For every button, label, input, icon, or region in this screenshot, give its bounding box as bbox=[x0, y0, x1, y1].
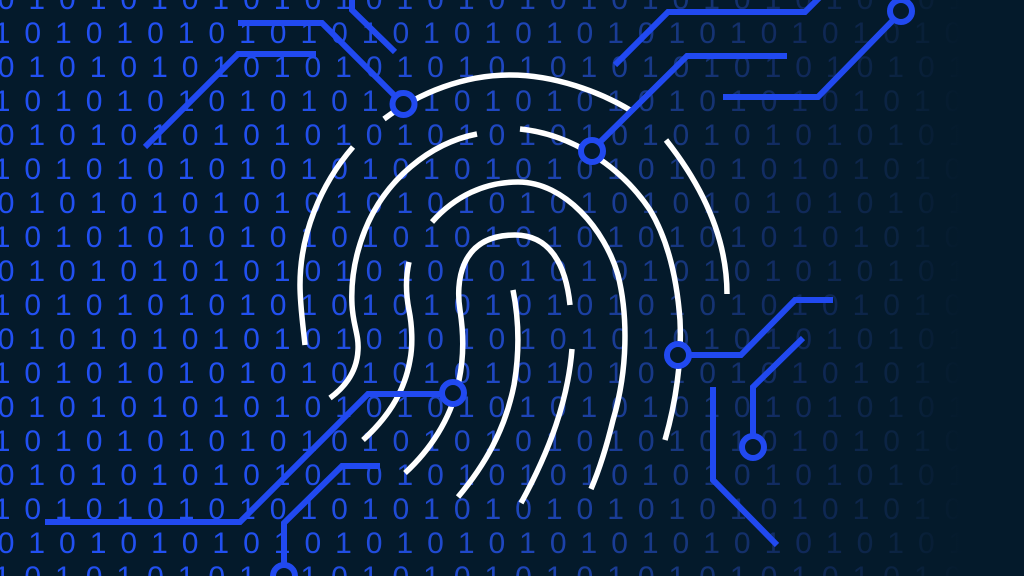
binary digit grid: 0101010101010101010101010101010101 bbox=[0, 391, 1024, 424]
circuit nodes bbox=[273, 0, 912, 576]
binary digit grid: 1010101010101010101010101010101010 bbox=[0, 85, 1024, 118]
binary digit grid: 0101010101010101010101010101010101 bbox=[0, 51, 1024, 84]
binary digit grid: 0101010101010101010101010101010101 bbox=[0, 527, 1024, 560]
binary digit grid: 1010101010101010101010101010101010 bbox=[0, 153, 1024, 186]
binary digit grid: 1010101010101010101010101010101010 bbox=[0, 17, 1024, 50]
binary digit grid: 1010101010101010101010101010101010 bbox=[0, 425, 1024, 458]
binary digit grid: 0101010101010101010101010101010101 bbox=[0, 459, 1024, 492]
binary digit grid: 0101010101010101010101010101010101 bbox=[0, 187, 1024, 220]
binary digit grid: 1010101010101010101010101010101010 bbox=[0, 221, 1024, 254]
binary digit grid: 0101010101010101010101010101010101 bbox=[0, 255, 1024, 288]
fingerprint ridges bbox=[300, 75, 727, 503]
binary digit grid: 1010101010101010101010101010101010 bbox=[0, 289, 1024, 322]
binary digit grid: 1010101010101010101010101010101010 bbox=[0, 357, 1024, 390]
binary digit grid: 0101010101010101010101010101010101 bbox=[0, 323, 1024, 356]
binary digit grid: 1010101010101010101010101010101010 bbox=[0, 493, 1024, 526]
binary digit grid: 0101010101010101010101010101010101 bbox=[0, 119, 1024, 152]
